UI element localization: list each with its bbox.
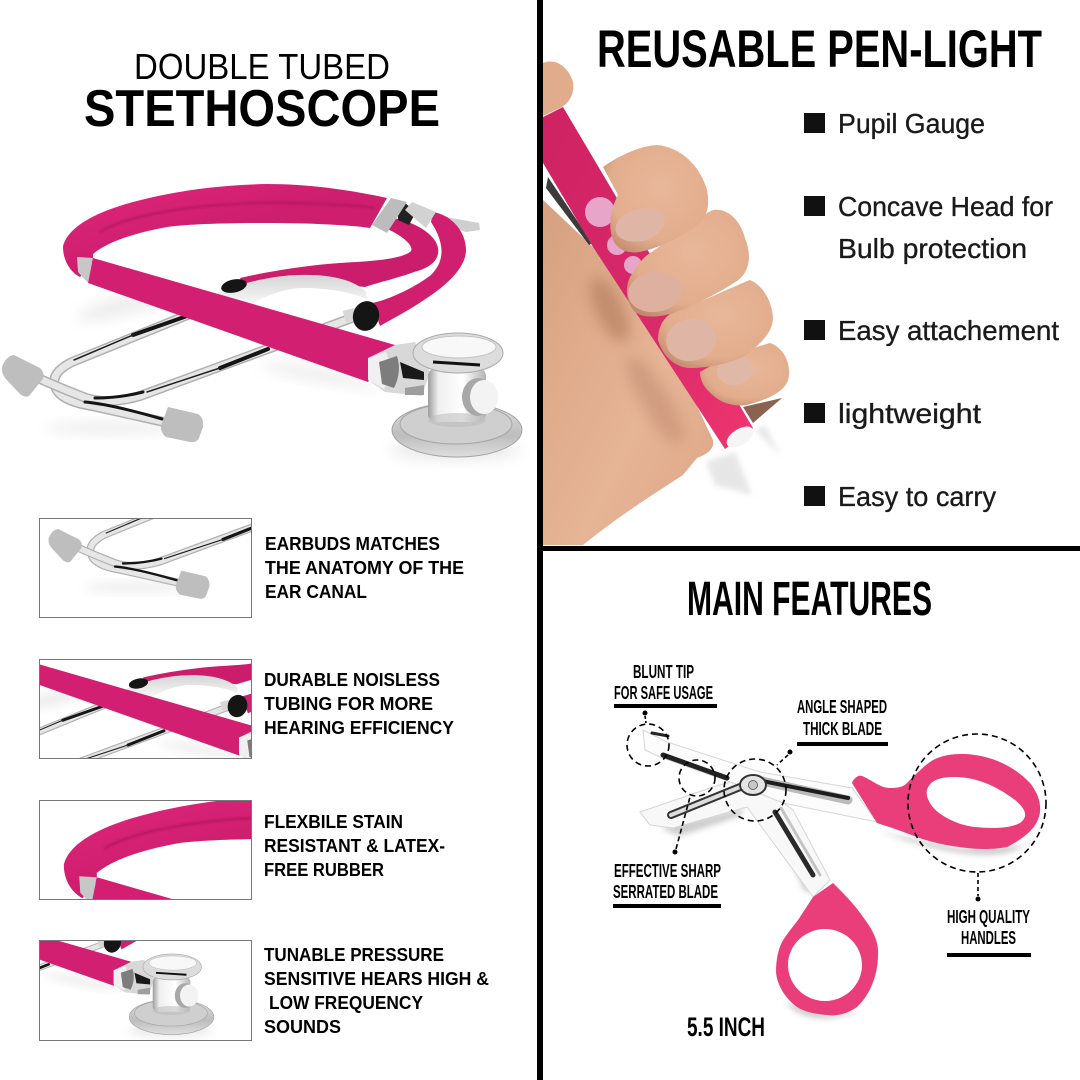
text: tubing: DURABLE NOISLESS — [264, 670, 440, 690]
inner pink tube — [240, 218, 438, 287]
text: rubber: RESISTANT & LATEX- — [264, 836, 445, 856]
text: rubber: FLEXBILE STAIN — [264, 812, 403, 832]
pen body — [543, 107, 753, 449]
callout: angle shaped blade — [724, 697, 888, 821]
panel divider: vertical — [537, 0, 543, 1080]
pen dots — [585, 197, 642, 274]
silver ear tubes — [38, 314, 360, 422]
handle: right — [852, 754, 1040, 849]
pen clip — [546, 177, 592, 245]
under pinky shade — [743, 398, 782, 423]
heading: double tubed stethoscope: DOUBLE TUBED — [134, 46, 390, 87]
text: rubber: FREE RUBBER — [264, 860, 384, 880]
scissors shadow — [660, 808, 1045, 1018]
feature list: pen-light — [804, 108, 1059, 512]
thumbnail: tubing — [39, 659, 252, 759]
pen light tip — [726, 426, 753, 448]
text: chest piece: SOUNDS — [264, 1017, 341, 1037]
thumb — [543, 62, 573, 116]
text: chest piece: SENSITIVE HEARS HIGH & — [264, 969, 489, 989]
text: earbuds: THE ANATOMY OF THE — [265, 558, 464, 578]
upper blade — [643, 730, 877, 822]
light shadows — [706, 425, 780, 495]
text: chest piece: TUNABLE PRESSURE — [264, 945, 444, 965]
text: earbuds: EAR CANAL — [265, 582, 367, 602]
text: tubing: TUBING FOR MORE — [264, 694, 433, 714]
text: rubber — [264, 812, 445, 880]
text: earbuds: EARBUDS MATCHES — [265, 534, 440, 554]
panel divider: horizontal — [537, 546, 1080, 551]
blade slots — [652, 733, 848, 875]
item: easy attachement: Easy attachement — [838, 315, 1059, 346]
text: earbuds — [265, 534, 464, 602]
metal clips — [77, 198, 436, 283]
thumbnail: rubber — [39, 800, 252, 900]
heading: main features: MAIN FEATURES — [687, 573, 932, 626]
stethoscope illustration — [2, 184, 522, 460]
callout: serrated blade — [613, 760, 721, 908]
tube seam — [100, 203, 375, 232]
binaural spring plate — [218, 275, 367, 304]
chest clip end piece — [446, 217, 480, 232]
outer right pink tube — [372, 212, 466, 326]
text: chest piece — [264, 945, 489, 1037]
black collars — [220, 277, 382, 334]
callout: serrated blade: EFFECTIVE SHARP — [614, 861, 721, 881]
callout: angle shaped blade: THICK BLADE — [803, 719, 882, 739]
heading: double tubed stethoscope — [84, 46, 440, 138]
heading: double tubed stethoscope: STETHOSCOPE — [84, 80, 440, 138]
size label: 5.5 INCH — [687, 1012, 765, 1042]
scissors illustration — [640, 730, 1045, 1018]
callout: blunt tip — [614, 662, 717, 766]
callout: blunt tip: BLUNT TIP — [633, 662, 694, 682]
lower blade — [640, 777, 830, 897]
hand holding pen-light photo — [543, 62, 789, 545]
thumbnail: earbuds — [39, 518, 252, 618]
callout: handles: HIGH QUALITY — [947, 907, 1030, 927]
callout: handles — [908, 734, 1046, 957]
callout: angle shaped blade: ANGLE SHAPED — [797, 697, 887, 717]
palm — [543, 200, 713, 545]
text: tubing: HEARING EFFICIENCY — [264, 718, 454, 738]
ear tips — [2, 355, 203, 442]
chest piece — [368, 333, 522, 457]
pivot screw — [740, 775, 766, 795]
crossing pink tube — [88, 258, 395, 382]
item: concave head: Concave Head for — [838, 191, 1053, 222]
text: tubing — [264, 670, 454, 738]
item: concave head: Bulb protection — [838, 233, 1027, 264]
item: concave head — [804, 191, 1053, 264]
text: chest piece: LOW FREQUENCY — [269, 993, 423, 1013]
fingers — [603, 145, 789, 406]
item: easy to carry: Easy to carry — [838, 481, 996, 512]
callout: serrated blade: SERRATED BLADE — [613, 882, 718, 902]
pink double tube band — [63, 184, 387, 277]
item: lightweight: lightweight — [838, 398, 981, 429]
thumbnail: chest piece — [39, 940, 252, 1041]
callout: handles: HANDLES — [961, 928, 1016, 948]
handle: bottom — [776, 883, 878, 1015]
callout: blunt tip: FOR SAFE USAGE — [614, 683, 713, 703]
item: pupil gauge: Pupil Gauge — [838, 108, 985, 139]
